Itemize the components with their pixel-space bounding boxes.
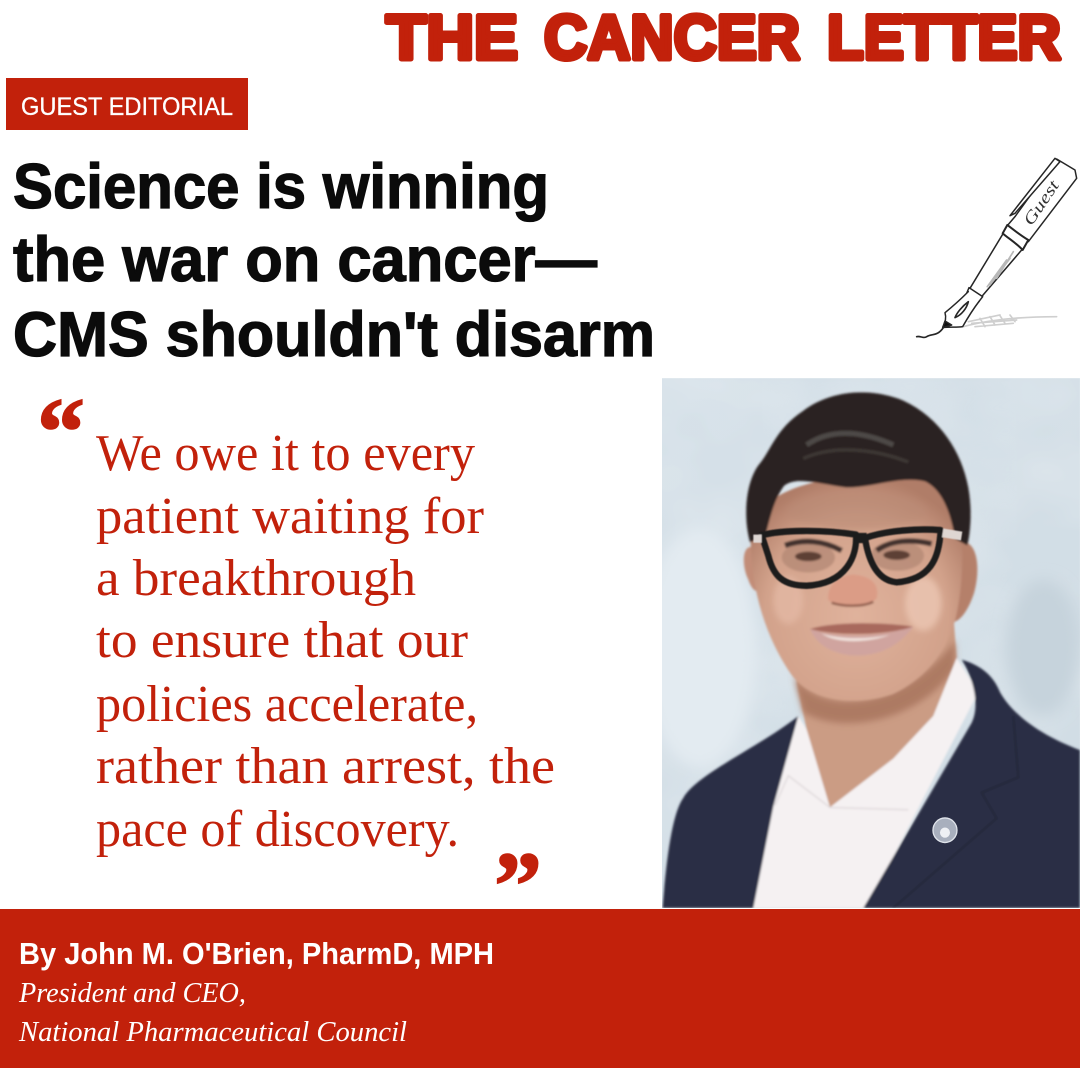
glasses [753, 530, 962, 586]
icon: fountain pen: Guest [1019, 176, 1063, 229]
headline: Science is winning [13, 152, 549, 222]
pull quote: rather than arrest, the [96, 738, 555, 795]
headline: CMS shouldn't disarm [13, 300, 655, 370]
pull quote [96, 425, 555, 858]
pull quote: policies accelerate, [96, 676, 478, 733]
masthead: The Cancer Letter [386, 3, 1061, 73]
author title: President and CEO, [18, 977, 246, 1009]
portrait photo [643, 378, 1080, 908]
eyes [782, 542, 835, 572]
section tag: guest editorial: GUEST EDITORIAL [21, 93, 233, 121]
ears [744, 547, 760, 591]
closing quotation mark: ” [494, 832, 542, 939]
pull quote: patient waiting for [96, 488, 484, 545]
author organization: National Pharmaceutical Council [18, 1016, 407, 1048]
author name: By John M. O'Brien, PharmD, MPH [19, 936, 494, 971]
hair [746, 392, 971, 546]
pull quote: pace of discovery. [96, 801, 459, 858]
face [751, 476, 962, 701]
mouth [812, 628, 910, 655]
jacket [663, 716, 798, 908]
neck [795, 614, 957, 807]
masthead: The Cancer Letter: LETTER [827, 3, 1061, 73]
opening quotation mark: “ [37, 378, 85, 485]
pull quote: a breakthrough [96, 550, 416, 607]
footer band: author byline [0, 909, 1080, 1068]
nose [828, 574, 877, 606]
headline [13, 152, 655, 370]
pull quote: We owe it to every [96, 425, 475, 482]
icon: fountain pen [917, 158, 1077, 337]
shirt [753, 658, 978, 908]
pull quote: to ensure that our [96, 612, 468, 669]
headline: the war on cancer— [13, 225, 597, 295]
lapel pin [933, 818, 957, 843]
masthead: The Cancer Letter: THE [386, 3, 518, 73]
section tag: guest editorial [6, 78, 248, 130]
masthead: The Cancer Letter: CANCER [544, 3, 800, 73]
